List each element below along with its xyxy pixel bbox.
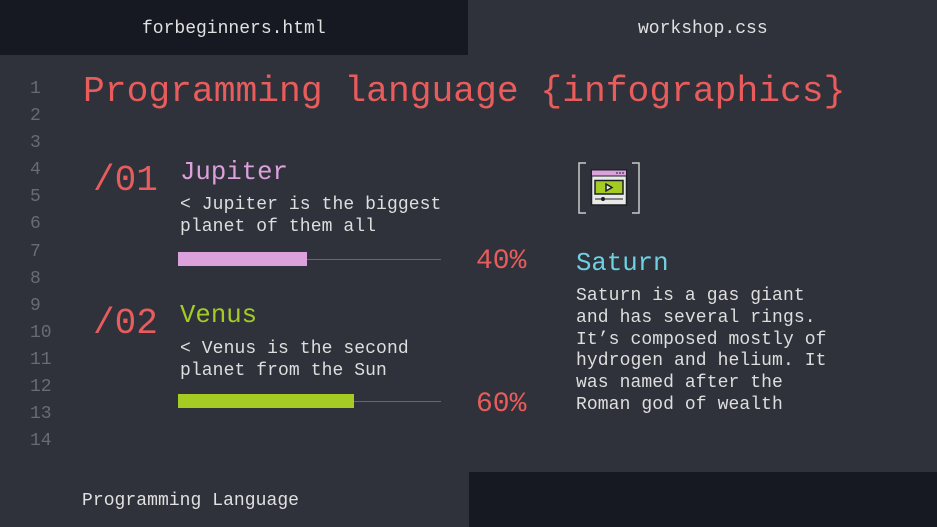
tab: forbeginners.html: forbeginners.html — [142, 19, 326, 39]
footer bar — [469, 472, 937, 527]
heading: Venus: Venus — [180, 301, 257, 330]
description: Venus: < Venus is the second planet from the Sun — [180, 339, 409, 381]
item 01: Jupiter — [93, 158, 526, 277]
number 02: /02 — [93, 303, 158, 344]
footer label: Programming Language — [82, 491, 299, 511]
title: Programming language {infographics} — [83, 71, 845, 112]
icon: video player window in brackets — [578, 162, 640, 214]
description: Jupiter: < Jupiter is the biggest planet of them all — [180, 195, 441, 237]
heading: Saturn: Saturn — [576, 249, 668, 278]
percentage: 60%: 60% — [476, 389, 526, 420]
tab: workshop.css: workshop.css — [638, 19, 768, 39]
heading: Jupiter: Jupiter — [180, 158, 288, 187]
number 01: /01 — [93, 160, 158, 201]
description: Saturn: Saturn is a gas giant and has several rings. It’s composed mostly of hydrogen and helium. It was named after the Roman god of wealth — [576, 286, 827, 415]
progress bar: Jupiter 40% — [178, 252, 441, 266]
tab: forbeginners.html — [0, 0, 468, 55]
percentage: 40%: 40% — [476, 246, 526, 277]
progress bar: Venus 60% — [178, 394, 441, 408]
line numbers: 1 2 3 4 5 6 7 8 9 10 11 12 13 14 — [30, 79, 52, 451]
item 02: Venus — [93, 301, 526, 420]
